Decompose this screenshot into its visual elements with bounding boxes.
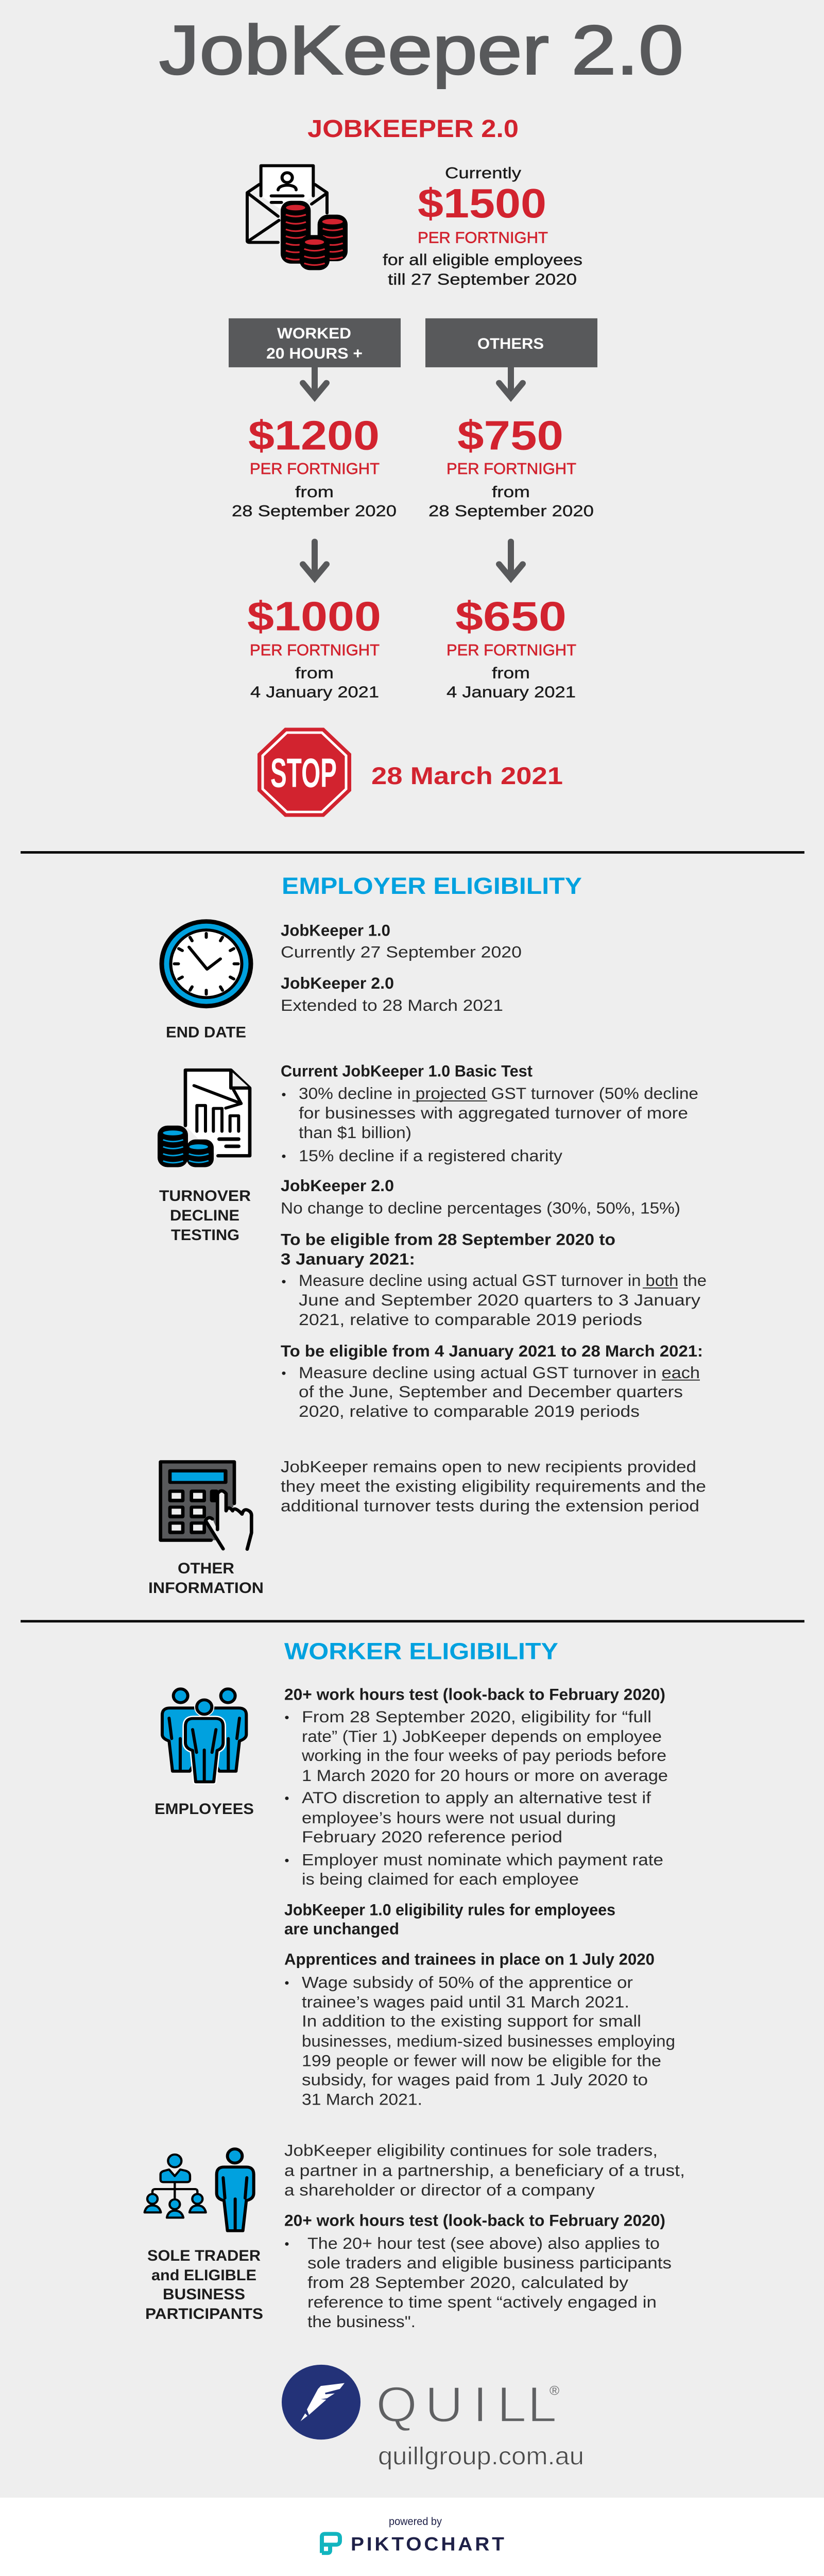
text: apprentices and trainees: subsidy, for wages paid from 1 July 2020 to (302, 2071, 648, 2089)
text: sole traders hours test (284, 2211, 672, 2331)
label: employees: EMPLOYEES (154, 1801, 254, 1818)
icon: envelope with coin stacks (247, 166, 348, 270)
rate: $1200 from 28 September 2020: PER FORTNIGHT (250, 460, 380, 478)
text: eligibility to 28 March 2021: To be eligible from 4 January 2021 to 28 March 2021: (281, 1342, 703, 1360)
website: quillgroup.com.au (378, 2442, 584, 2470)
text: 20+ work hours test: ATO discretion to apply an alternative test if (302, 1789, 651, 1807)
heading: employer eligibility: EMPLOYER ELIGIBILITY (282, 873, 582, 899)
text: JobKeeper 2.0 percentages: No change to decline percentages (30%, 50%, 15%) (281, 1199, 680, 1217)
icon: turnover document with coins (158, 1070, 250, 1167)
text: apprentices and trainees: 199 people or fewer will now be eligible for the (302, 2052, 661, 2070)
text: per fortnight: PER FORTNIGHT (418, 229, 548, 246)
text: sole traders hours test: the business". (307, 2313, 416, 2331)
heading: worker eligibility: WORKER ELIGIBILITY (284, 1638, 558, 1664)
text: eligibility to 28 March 2021 (281, 1342, 703, 1420)
panel: employer eligibility (148, 873, 707, 1597)
text: eligibility to 3 January 2021: 2021, relative to comparable 2019 periods (299, 1311, 642, 1329)
icon: stop sign (258, 728, 351, 817)
text: 20+ work hours test: employee’s hours were not usual during (302, 1809, 616, 1827)
box: others: OTHERS (477, 335, 544, 352)
text: end date details: Extended to 28 March 2021 (281, 996, 503, 1014)
wordmark: QUILL (376, 2377, 557, 2433)
text: 20+ work hours test: 1 March 2020 for 20 hours or more on average (302, 1767, 668, 1785)
panel: worker eligibility (145, 1638, 685, 2331)
text: current basic test: 15% decline if a registered charity (299, 1147, 563, 1165)
icon: organisation chart and person (145, 2149, 254, 2231)
box: others (425, 318, 597, 367)
label: sole trader and eligible business participants: PARTICIPANTS (145, 2306, 263, 2323)
box: worked 20 hours plus: 20 HOURS + (266, 345, 363, 362)
rate: $750 from 28 September 2020 (428, 413, 594, 520)
text: other information details: they meet the existing eligibility requirements and the (281, 1477, 706, 1495)
text: apprentices and trainees: trainee’s wages paid until 31 March 2021. (302, 1993, 629, 2011)
arrow: worked to $1200 (303, 367, 327, 397)
icon: calculator and hand (161, 1462, 251, 1549)
text: 20+ work hours test: working in the four weeks of pay periods before (301, 1747, 666, 1765)
text: 20+ work hours test: From 28 September 2020, eligibility for “full (302, 1708, 651, 1726)
text: 20+ work hours test: February 2020 reference period (302, 1828, 562, 1846)
icon: three employees (162, 1689, 246, 1782)
text: end date details: JobKeeper 1.0 (281, 921, 390, 939)
text: eligibility to 3 January 2021: Measure decline using actual GST turnover in both the (299, 1272, 707, 1290)
text: current basic test: than $1 billion) (299, 1124, 411, 1142)
label: turnover decline testing: DECLINE (170, 1207, 239, 1224)
text: sole traders eligibility: a shareholder or director of a company (284, 2181, 595, 2199)
text: JobKeeper 2.0 percentages (281, 1177, 680, 1217)
text: eligibility to 28 March 2021: of the June, September and December quarters (299, 1383, 683, 1401)
text: current basic test: 30% decline in projected GST turnover (50% decline (299, 1084, 698, 1103)
text: eligibility to 3 January 2021 (281, 1230, 707, 1329)
label: sole trader and eligible business participants: BUSINESS (163, 2286, 245, 2303)
text: 20+ work hours test: Employer must nominate which payment rate (302, 1851, 663, 1869)
text: current basic test: Current JobKeeper 1.0 Basic Test (281, 1062, 533, 1080)
text: apprentices and trainees (284, 1950, 675, 2108)
text: other information details: additional turnover tests during the extension period (281, 1497, 699, 1515)
text: 20+ work hours test: is being claimed for each employee (302, 1870, 579, 1888)
panel: payment rates (229, 114, 597, 817)
text: end date details: Currently 27 September 2020 (281, 943, 522, 961)
arrow: $1200 to $1000 (303, 541, 327, 579)
text: sole traders eligibility (284, 2141, 685, 2199)
label: turnover decline testing: TESTING (171, 1227, 239, 1244)
text: sole traders eligibility: JobKeeper eligibility continues for sole traders, (284, 2141, 658, 2159)
text: current basic test: for businesses with aggregated turnover of more (299, 1104, 688, 1122)
text: powered by: powered by (389, 2516, 442, 2528)
text: JobKeeper 2.0 percentages: JobKeeper 2.0 (281, 1177, 394, 1195)
text: eligibility to 28 March 2021: 2020, relative to comparable 2019 periods (299, 1402, 640, 1420)
heading: JobKeeper 2.0: JOBKEEPER 2.0 (307, 114, 519, 143)
label: end date: END DATE (166, 1024, 246, 1041)
rate: $750 from 28 September 2020: $750 (457, 413, 563, 459)
text: eligibility to 3 January 2021: To be eligible from 28 September 2020 to (281, 1230, 615, 1248)
label: other information: OTHER (178, 1561, 234, 1577)
rate: $650 from 4 January 2021: PER FORTNIGHT (447, 641, 576, 659)
rate: $1000 from 4 January 2021 (247, 594, 381, 701)
title: JobKeeper 2.0 (159, 12, 683, 89)
text: eligibility to 3 January 2021: 3 January 2021: (281, 1250, 415, 1268)
icon: stop sign: STOP (270, 750, 337, 796)
box: worked 20 hours plus: WORKED (277, 326, 351, 342)
rate: $650 from 4 January 2021 (447, 594, 576, 701)
text: other information details: JobKeeper remains open to new recipients provided (281, 1458, 696, 1476)
label: sole trader and eligible business participants (145, 2247, 263, 2323)
rate: $1000 from 4 January 2021: PER FORTNIGHT (250, 641, 380, 659)
icon: clock (160, 919, 253, 1008)
rate: $750 from 28 September 2020: 28 September 2020 (428, 502, 594, 520)
arrow: $750 to $650 (499, 541, 523, 579)
icon: quill feather (282, 2365, 360, 2439)
text: end date details (281, 921, 522, 1014)
rate: $1200 from 28 September 2020: from (295, 483, 334, 501)
text: apprentices and trainees: 31 March 2021. (302, 2090, 422, 2108)
text: eligibility to 3 January 2021: June and September 2020 quarters to 3 January (299, 1291, 701, 1309)
text: stop date: 28 March 2021 (371, 762, 563, 790)
rate: $1000 from 4 January 2021: 4 January 2021 (250, 683, 379, 701)
text: apprentices and trainees: In addition to the existing support for small (302, 2012, 641, 2030)
label: sole trader and eligible business participants: SOLE TRADER (147, 2247, 261, 2264)
wordmark: Piktochart: PIKTOCHART (351, 2534, 504, 2555)
text: sole traders hours test: The 20+ hour test (see above) also applies to (307, 2234, 660, 2252)
registered mark: ® (550, 2384, 559, 2398)
rate: $1200 from 28 September 2020: 28 September 2020 (232, 502, 397, 520)
rate: $750 from 28 September 2020: PER FORTNIGHT (447, 460, 576, 478)
text: apprentices and trainees: Wage subsidy of 50% of the apprentice or (302, 1973, 633, 1991)
rate: $1200 from 28 September 2020 (232, 413, 397, 520)
icon: Piktochart mark (322, 2534, 340, 2553)
text: currently: Currently (445, 164, 521, 182)
rate: $750 from 28 September 2020: from (492, 483, 530, 501)
text: current basic test (281, 1062, 698, 1165)
rate: $650 from 4 January 2021: 4 January 2021 (447, 683, 576, 701)
text: eligibility note: till 27 September 2020 (388, 270, 577, 288)
rate: $1200 from 28 September 2020: $1200 (248, 413, 380, 459)
footer: powered by Piktochart (322, 2516, 504, 2555)
text: eligibility to 28 March 2021: Measure decline using actual GST turnover in each (299, 1364, 700, 1382)
text: eligibility note: for all eligible employees (383, 251, 582, 268)
text: other information details (281, 1458, 706, 1515)
text: end date details: JobKeeper 2.0 (281, 974, 394, 992)
text: sole traders hours test: 20+ work hours test (look-back to February 2020) (284, 2211, 665, 2229)
text: eligibility rules unchanged (284, 1901, 615, 1938)
text: eligibility rules unchanged: JobKeeper 1.0 eligibility rules for employees (284, 1901, 615, 1919)
logo: Quill (282, 2365, 584, 2470)
text: sole traders eligibility: a partner in a partnership, a beneficiary of a trust, (284, 2161, 685, 2179)
rate: $650 from 4 January 2021: from (492, 664, 530, 682)
label: other information: INFORMATION (148, 1580, 264, 1597)
text: eligibility note (383, 251, 582, 288)
text: sole traders hours test: reference to time spent “actively engaged in (307, 2293, 657, 2311)
label: turnover decline testing (159, 1188, 251, 1244)
text: apprentices and trainees: businesses, medium-sized businesses employing (302, 2032, 675, 2050)
text: eligibility rules unchanged: are unchanged (284, 1920, 399, 1938)
text: 20+ work hours test (284, 1685, 668, 1888)
text: apprentices and trainees: Apprentices and trainees in place on 1 July 2020 (284, 1950, 655, 1969)
figure: $1500: $1500 (418, 181, 546, 227)
text: 20+ work hours test: rate” (Tier 1) JobKeeper depends on employee (302, 1727, 662, 1745)
label: sole trader and eligible business participants: and ELIGIBLE (151, 2267, 256, 2284)
arrow: others to $750 (499, 367, 523, 397)
current rate block (383, 164, 582, 288)
text: sole traders hours test: from 28 September 2020, calculated by (307, 2274, 629, 2292)
text: 20+ work hours test: 20+ work hours test (look-back to February 2020) (284, 1685, 665, 1703)
box: worked 20 hours plus (229, 318, 401, 367)
rate: $1000 from 4 January 2021: $1000 (247, 594, 381, 639)
label: turnover decline testing: TURNOVER (159, 1188, 251, 1205)
rate: $1000 from 4 January 2021: from (295, 664, 334, 682)
label: other information (148, 1561, 264, 1597)
rate: $650 from 4 January 2021: $650 (455, 594, 566, 639)
text: sole traders hours test: sole traders and eligible business participants (307, 2254, 672, 2272)
